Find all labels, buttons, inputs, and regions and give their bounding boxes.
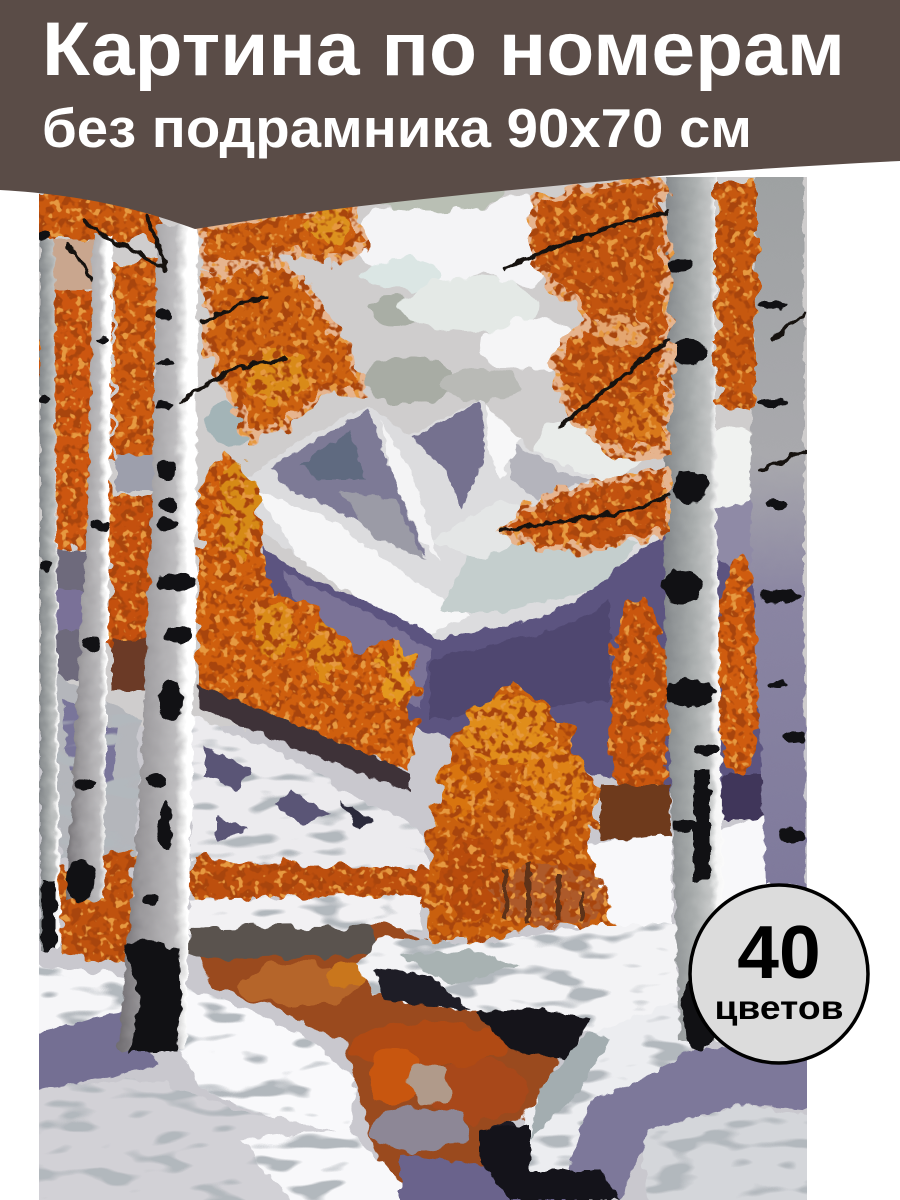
orange foliage upper left: [200, 205, 365, 435]
trunk bark marks: [38, 229, 805, 1052]
branches: [68, 212, 805, 530]
slope shadows: [205, 745, 372, 842]
centre orange bush: [425, 678, 616, 945]
title: Картина по номерам: [42, 7, 845, 92]
sky and clouds: [204, 190, 752, 508]
birch trunks: [40, 170, 806, 1050]
badge: 40 colours: [690, 885, 868, 1063]
stream: [188, 925, 560, 1200]
right orange trees: [607, 554, 760, 787]
mountains: [245, 400, 660, 640]
bush stems: [503, 862, 584, 922]
left snowy slope: [45, 670, 432, 875]
orange meadow band: [56, 850, 440, 960]
mid snow bank: [39, 892, 422, 1034]
badge label: цветов: [714, 989, 844, 1026]
snow shadows: [30, 950, 810, 1200]
tree line base shadow: [198, 685, 410, 792]
snow banks around the stream: [30, 925, 810, 1200]
purple forest in the valley: [262, 499, 764, 792]
left background foliage: [30, 190, 160, 652]
badge number: 40: [737, 910, 821, 994]
snow behind the bush: [575, 815, 770, 930]
painting: autumn birches and snowy mountains: [30, 170, 820, 1200]
right tree bases: [600, 775, 772, 840]
orange foliage upper right: [500, 177, 756, 550]
subtitle: без подрамника 90х70 см: [42, 97, 752, 159]
painting base tone: [39, 725, 807, 1200]
left background shadows: [45, 240, 158, 690]
header banner: [0, 0, 900, 229]
left orange tree line: [198, 450, 416, 770]
